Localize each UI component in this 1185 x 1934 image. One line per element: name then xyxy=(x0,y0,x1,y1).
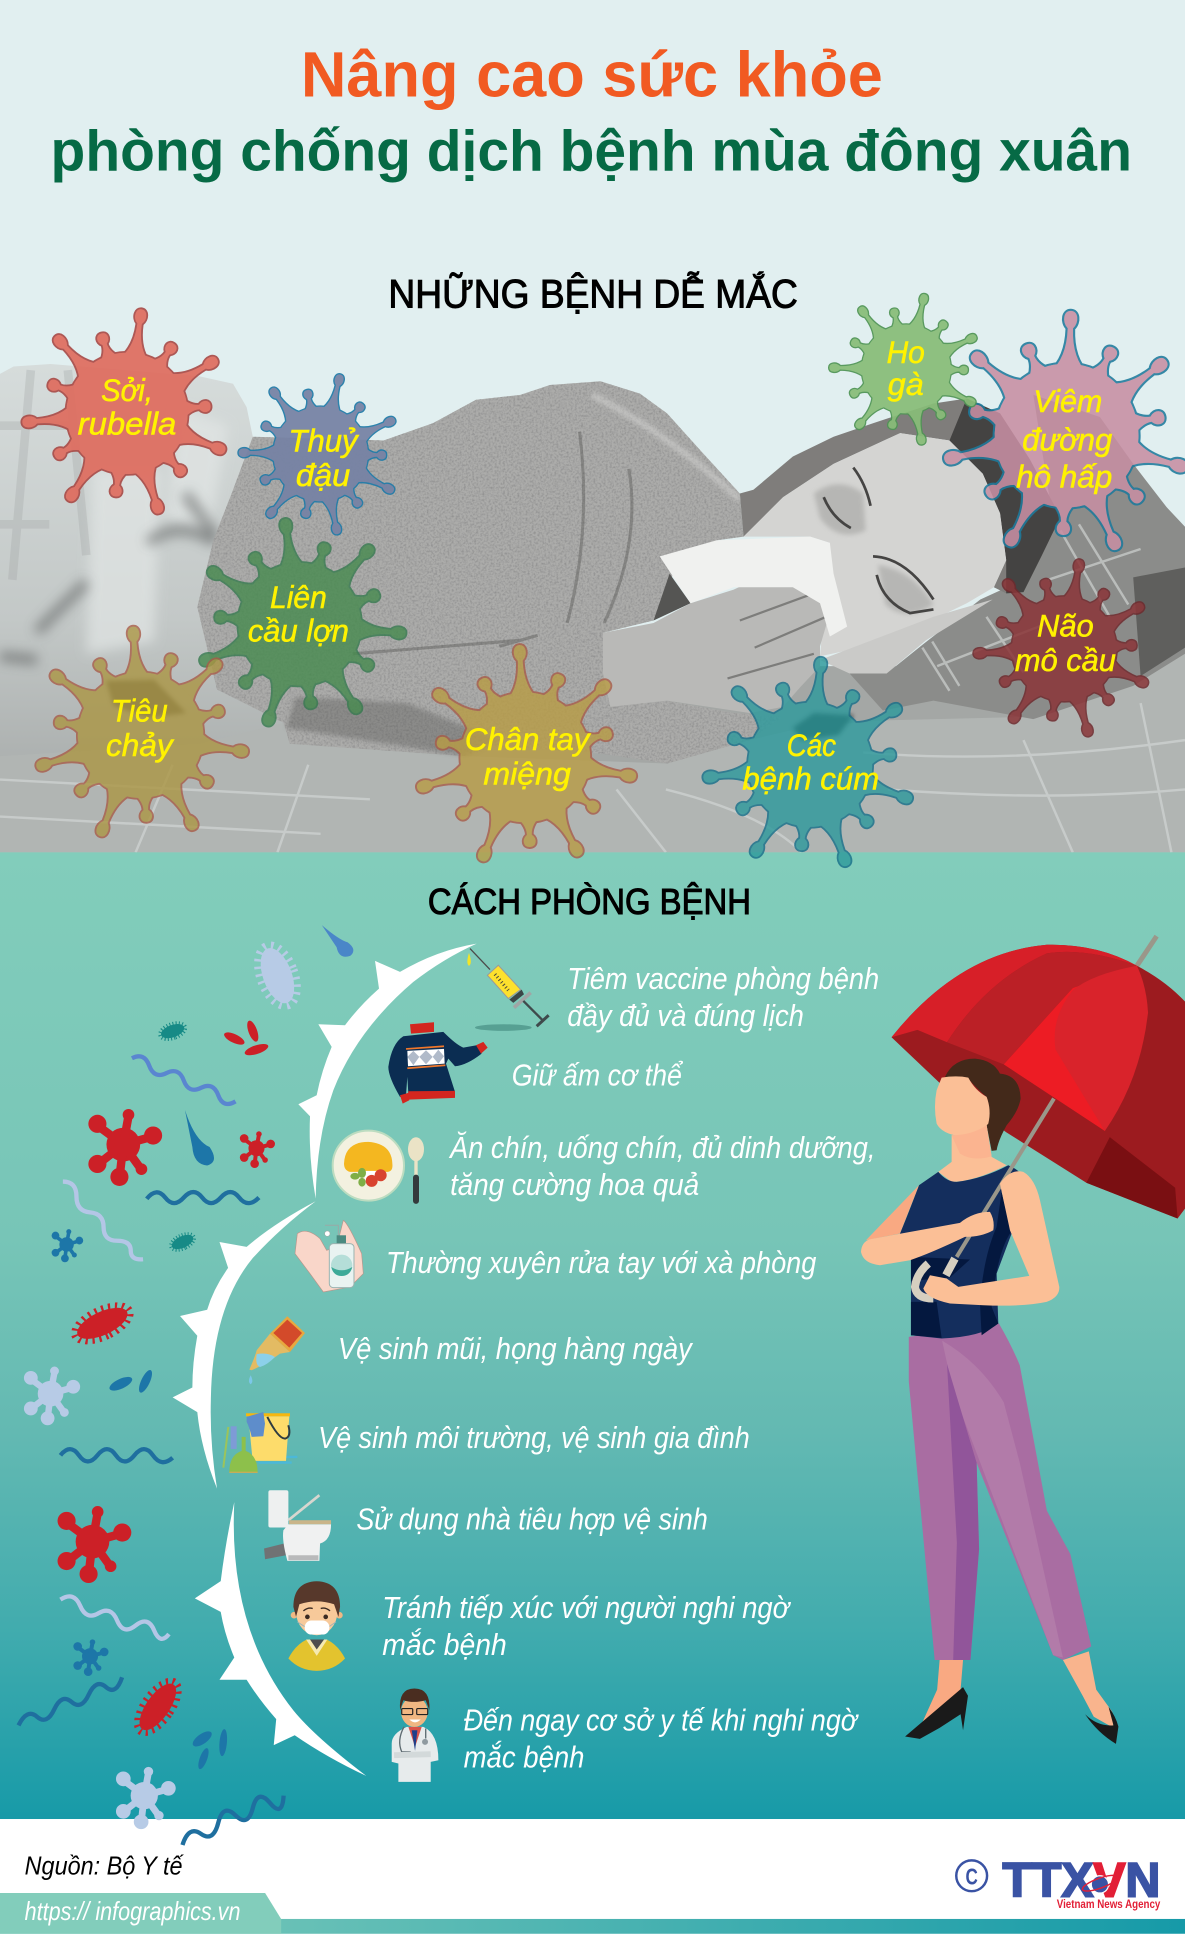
copyright mark xyxy=(956,1860,987,1891)
face xyxy=(935,1076,990,1136)
hair xyxy=(740,399,1060,593)
white shield arc 3 xyxy=(195,1502,366,1776)
virus: Liên cầu lợn: Liên xyxy=(270,580,327,615)
virus: Chân tay miệng: miệng xyxy=(483,757,571,792)
icon: toilet xyxy=(264,1490,331,1561)
title line 1: Nâng cao sức khỏe xyxy=(301,38,883,110)
wordmark: TTXVN xyxy=(1003,1854,1160,1908)
shadow wedge behind hand xyxy=(654,574,691,621)
bedding xyxy=(0,364,296,789)
virus: Sởi, rubella: rubella xyxy=(78,406,176,441)
white shield arc 2 xyxy=(173,1201,316,1489)
virus: Các bệnh cúm: Các xyxy=(787,728,836,763)
prevention list: mắc bệnh xyxy=(464,1741,584,1774)
item: wash hands: Thường xuyên rửa tay với xà phòng xyxy=(386,1247,816,1280)
icon: nasal spray bottle xyxy=(249,1316,305,1384)
far arm xyxy=(866,1185,919,1240)
panel: footer background xyxy=(0,1819,1185,1934)
umbrella canopy xyxy=(1137,936,1157,966)
prevention list: đầy đủ và đúng lịch xyxy=(567,1000,804,1033)
icon: cleaning tools xyxy=(223,1412,297,1472)
pillow and plaid sleeve xyxy=(850,395,1185,719)
icon: doctor xyxy=(392,1689,438,1782)
icon: person with mask xyxy=(288,1581,345,1671)
footer bar xyxy=(0,1919,1185,1934)
cheek hand xyxy=(820,600,993,674)
virus: Liên cầu lợn xyxy=(177,503,421,742)
shoes xyxy=(905,1687,968,1739)
prevention list: tăng cường hoa quả xyxy=(450,1169,699,1202)
virus: Sởi, rubella: Sởi, xyxy=(101,373,153,408)
source note: Nguồn: Bộ Y tế xyxy=(25,1853,184,1881)
item: nose and throat: Vệ sinh mũi, họng hàng ngày xyxy=(338,1333,693,1366)
virus: Não mô cầu: mô cầu xyxy=(1015,643,1116,678)
dark shadow under arm xyxy=(793,713,853,740)
icon: food plate xyxy=(333,1131,424,1201)
icon: washing hands xyxy=(295,1220,363,1292)
legs xyxy=(920,1660,963,1728)
virus: Chân tay miệng xyxy=(405,638,646,873)
virus: Tiêu chảy: Tiêu xyxy=(111,694,168,729)
virus: Sởi, rubella xyxy=(7,293,248,530)
virus: Viêm đường hô hấp xyxy=(935,305,1185,562)
virus: Não mô cầu xyxy=(958,543,1171,752)
closed eyes and eyebrows xyxy=(824,468,933,613)
footer tab with website: https:// infographics.vn xyxy=(25,1898,240,1926)
virus: Chân tay miệng: Chân tay xyxy=(465,722,592,757)
photo: sick woman lying in bed xyxy=(0,364,1185,852)
virus: Ho gà: Ho xyxy=(887,335,925,370)
logo: TTXVN xyxy=(956,1854,1160,1911)
dark fold xyxy=(106,680,186,718)
virus: Não mô cầu: Não xyxy=(1037,609,1094,644)
neck and chest xyxy=(938,1125,1007,1182)
hair xyxy=(945,1059,1021,1151)
illustration: woman with red umbrella xyxy=(861,936,1185,1744)
item: see a doctor: Đến ngay cơ sở y tế khi nghi ngờ xyxy=(464,1704,859,1737)
lower blanket xyxy=(0,646,1185,852)
item: keep warm: Giữ ấm cơ thể xyxy=(512,1059,684,1092)
virus: Viêm đường hô hấp: đường xyxy=(1022,422,1113,457)
heading: prevention: CÁCH PHÒNG BỆNH xyxy=(428,882,751,922)
face xyxy=(744,433,1006,656)
pants xyxy=(909,1323,1091,1660)
white shield arc 1 xyxy=(298,944,477,1199)
top xyxy=(900,1165,1028,1339)
umbrella handle xyxy=(915,1259,955,1299)
heading: common diseases: NHỮNG BỆNH DỄ MẮC xyxy=(388,272,798,316)
title xyxy=(51,38,1132,183)
upper body drawn from the crop xyxy=(861,1059,1059,1339)
virus: Viêm đường hô hấp: Viêm xyxy=(1033,384,1102,419)
agency name: Vietnam News Agency xyxy=(1057,1897,1160,1911)
virus: Viêm đường hô hấp: hô hấp xyxy=(1016,459,1112,494)
item: vaccination: Tiêm vaccine phòng bệnh xyxy=(567,963,879,996)
tissue xyxy=(660,537,847,637)
virus: Ho gà: gà xyxy=(888,367,924,402)
icon: sweater xyxy=(388,1022,488,1104)
hand xyxy=(603,554,829,713)
icon: syringe xyxy=(467,949,549,1031)
item: food: Ăn chín, uống chín, đủ dinh dưỡng, xyxy=(448,1132,875,1165)
virus: Thuỷ đậu: Thuỷ xyxy=(289,424,360,459)
germs on the left xyxy=(18,925,353,1845)
title line 2: phòng chống dịch bệnh mùa đông xuân xyxy=(51,119,1132,183)
virus: Các bệnh cúm xyxy=(690,645,931,881)
umbrella stick xyxy=(957,1099,1054,1257)
globe xyxy=(1091,1876,1109,1893)
sweater xyxy=(197,381,783,764)
background: top section xyxy=(0,0,1185,863)
item: toilet: Sử dụng nhà tiêu hợp vệ sinh xyxy=(356,1503,708,1536)
virus: Tiêu chảy: chảy xyxy=(106,728,175,763)
near hand and arm xyxy=(861,1212,994,1265)
virus: Thuỷ đậu: đậu xyxy=(296,458,350,493)
panel: prevention background xyxy=(0,852,1185,1819)
footer tab with website xyxy=(0,1893,281,1934)
virus: Ho gà xyxy=(812,275,1001,461)
item: avoid contact: Tránh tiếp xúc với người nghi ngờ xyxy=(382,1592,792,1625)
logo: TTXVN: C xyxy=(966,1863,978,1889)
virus: Các bệnh cúm: bệnh cúm xyxy=(742,761,879,796)
prevention list: mắc bệnh xyxy=(382,1629,507,1662)
item: environment: Vệ sinh môi trường, vệ sinh gia đình xyxy=(318,1422,750,1455)
prevention list xyxy=(318,963,879,1774)
virus: Tiêu chảy xyxy=(22,618,259,849)
virus: Liên cầu lợn: cầu lợn xyxy=(248,613,349,648)
virus: Thuỷ đậu xyxy=(220,354,422,552)
photo base xyxy=(0,666,1185,852)
